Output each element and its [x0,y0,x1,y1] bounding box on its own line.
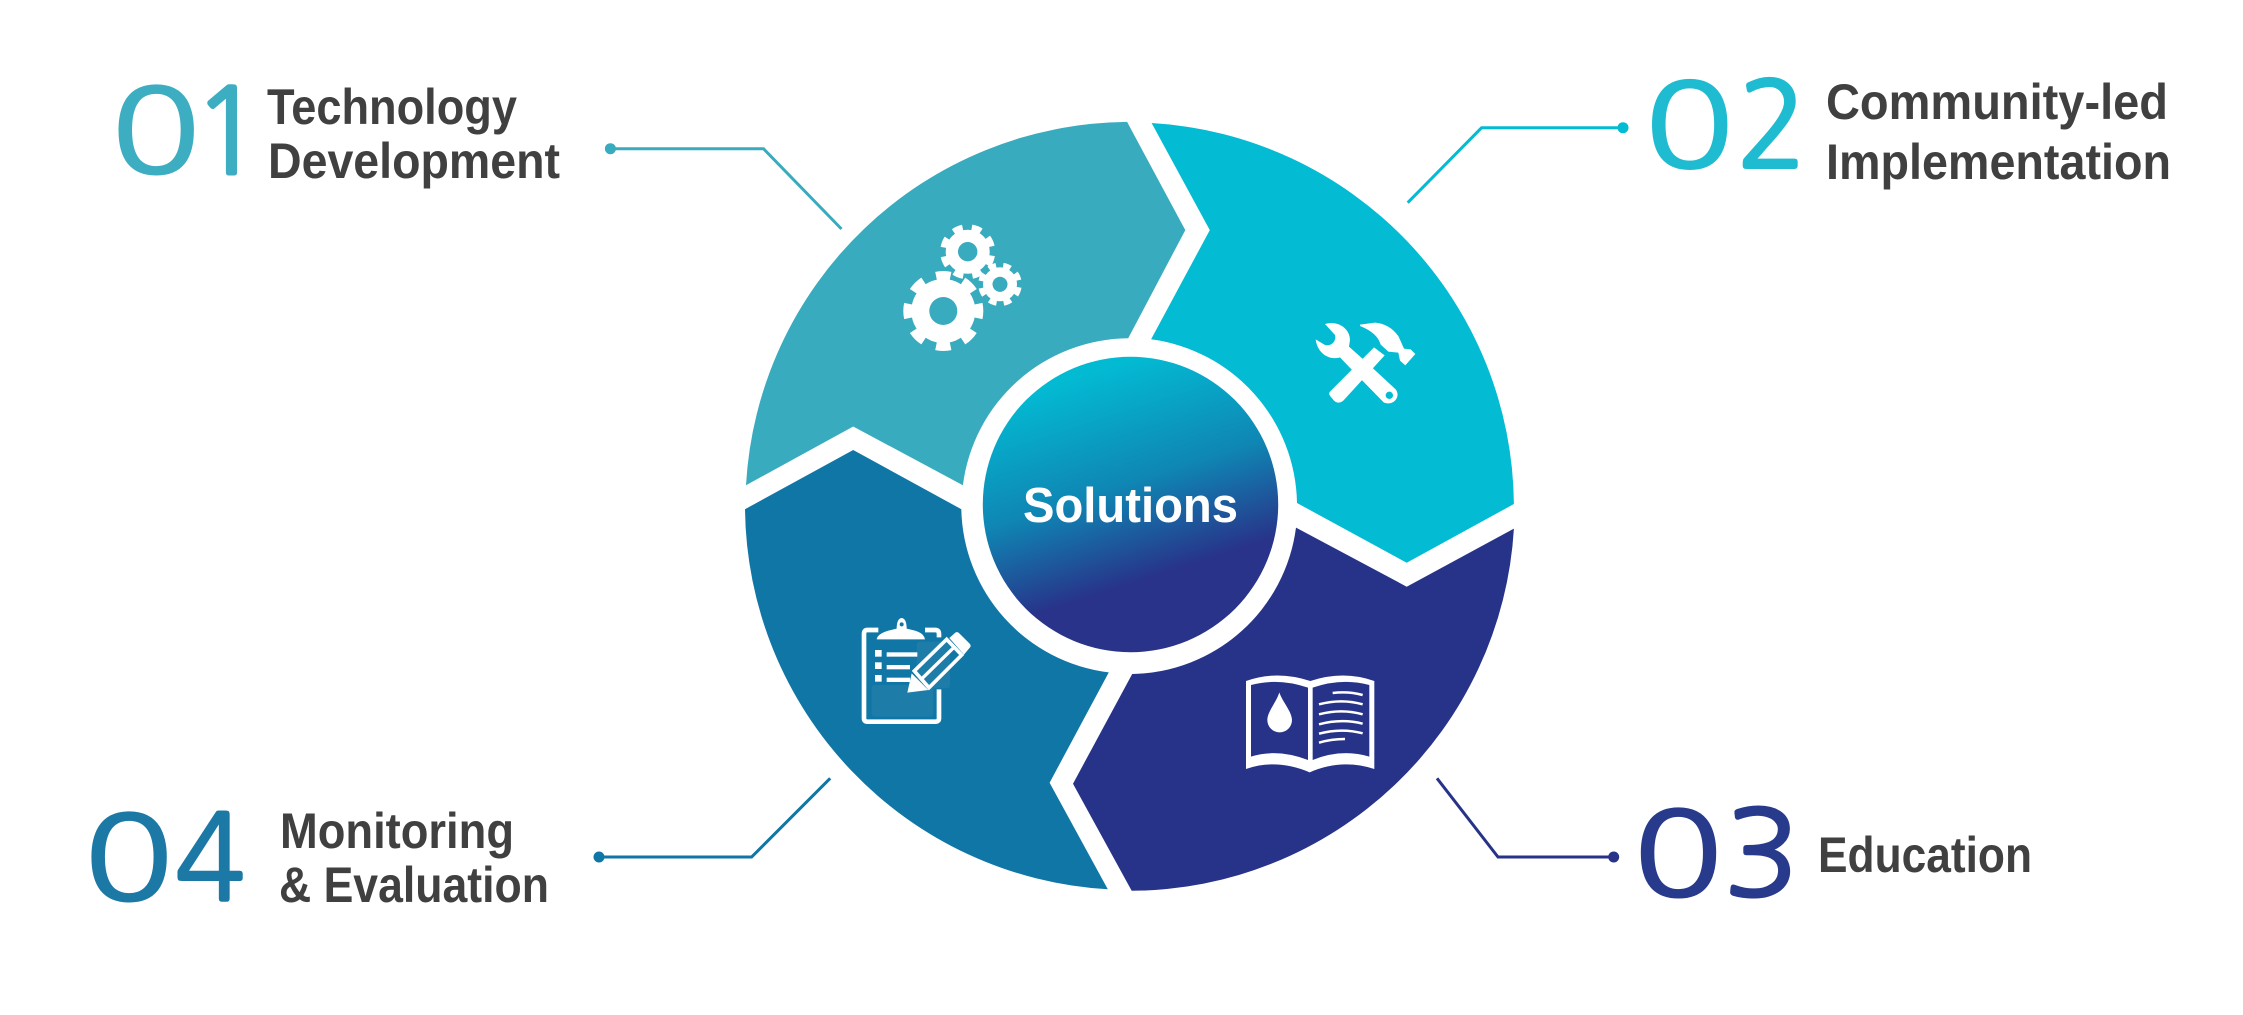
icon: wrench and hammer [1316,323,1415,403]
segment 3: Education [1073,528,1514,891]
label: Technology Development: Development [268,133,560,189]
number 02: 2 [1737,66,1807,184]
label: Monitoring & Evaluation [279,803,549,913]
center circle [983,357,1278,652]
segment 1: Technology Development [746,122,1185,485]
number 04 [84,799,245,918]
icon: open book with water drop [1246,675,1374,772]
number 01 [111,72,264,191]
label: Technology Development [267,79,560,189]
label: Monitoring & Evaluation: Monitoring [280,803,514,859]
icon: gears [908,220,1025,346]
number 02: 0 [1644,68,1734,186]
label: Technology Development: Technology [267,79,517,135]
number 03 [1633,795,1800,914]
number 01: 1 [192,72,264,190]
label: Education: Education [1818,827,2032,883]
number 01: 0 [111,73,201,191]
segment 2: Community-led Implementation [1151,123,1514,563]
number 02 [1644,66,1807,186]
segment 4: Monitoring and Evaluation [745,450,1109,889]
icon: clipboard and pencil [864,618,971,722]
connector 3 [1437,778,1619,862]
label: Monitoring & Evaluation: & Evaluation [279,857,549,913]
number 04: 0 [84,800,174,918]
label: Community-led Implementation: Community-led [1826,74,2168,130]
center label: Solutions [1023,479,1238,533]
connector 4 [594,778,830,862]
number 04: 4 [175,799,245,917]
label: Community-led Implementation [1826,74,2171,190]
number 03: 0 [1633,796,1723,914]
label: Community-led Implementation: Implementation [1826,134,2171,190]
number 03: 3 [1724,795,1800,913]
connector 1 [605,143,842,229]
connector 2 [1408,122,1628,203]
